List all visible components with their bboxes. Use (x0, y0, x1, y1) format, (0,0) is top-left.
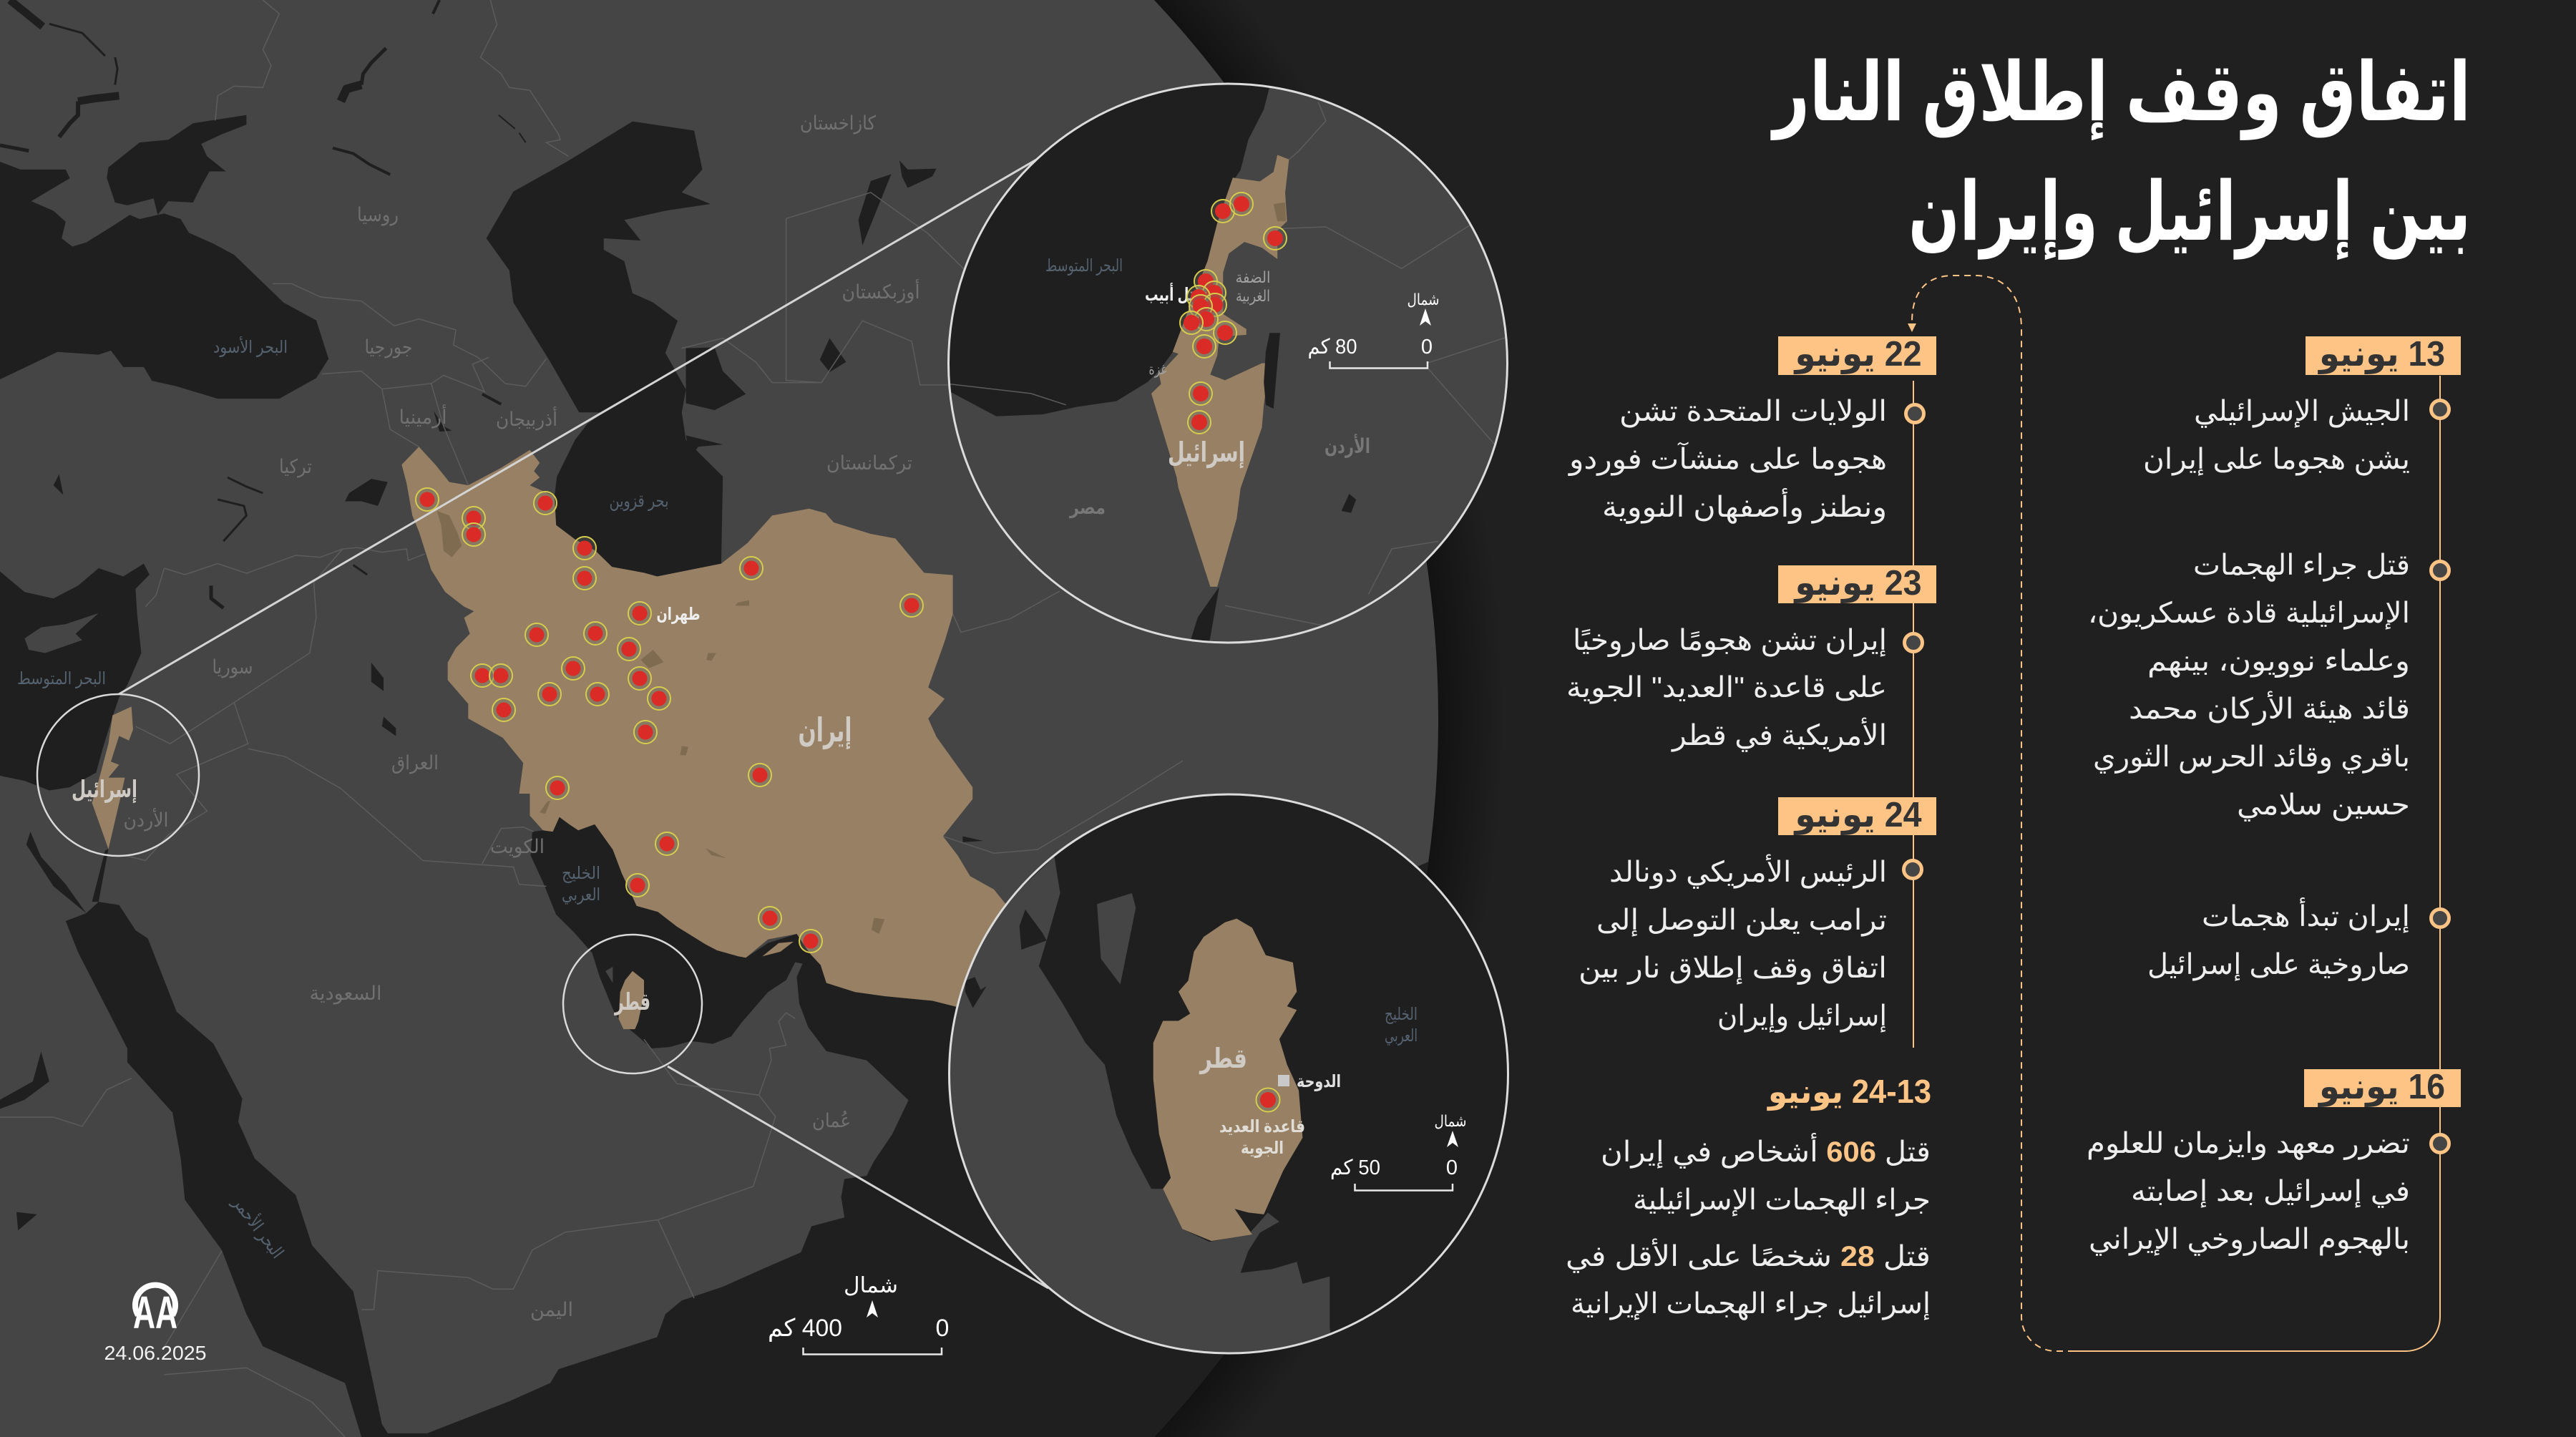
main map labels: البحر الأحمر (228, 1192, 288, 1262)
casualties: Iran: جراء الهجمات الإسرائيلية (1633, 1184, 1931, 1217)
inset labels: Qatar: قاعدة العديد (1219, 1117, 1305, 1136)
small circle: Qatar locator (563, 935, 702, 1073)
text: 13 June event 2: حسين سلامي (2237, 789, 2410, 822)
north arrow and scale bar: Israel: شمال (1407, 291, 1440, 308)
main map (0, 0, 1503, 1437)
main map labels: العراق (391, 752, 439, 774)
marker: Al Udeid (1257, 1088, 1279, 1112)
Qeshm island (762, 942, 794, 956)
main map labels: الأردن (123, 807, 169, 832)
main map labels: بحر قزوين (610, 492, 668, 511)
Iran lakes (437, 511, 884, 934)
inset labels: Israel (1045, 256, 1370, 519)
Bahrain (605, 967, 613, 983)
inset labels: Israel: غزة (1149, 362, 1166, 378)
text: 23 June event: إيران تشن هجومًا صاروخيًا (1573, 625, 1887, 657)
inset Israel shape (1151, 155, 1289, 587)
text: 16 June event (2087, 1128, 2410, 1256)
Israel shape on main map (92, 706, 133, 849)
text: 22 June event: هجوما على منشآت فوردو (1568, 442, 1887, 476)
text: 24 June event: إسرائيل وإيران (1717, 1000, 1887, 1033)
borders (0, 0, 1183, 1437)
Qatar shape on main map (618, 971, 644, 1029)
north arrow and scale bar: main map: 0 (936, 1315, 949, 1342)
text: 13 June event 2 (2088, 550, 2410, 822)
main map labels: كازاخستان (800, 112, 876, 135)
timeline bullets (1903, 401, 2449, 1152)
inset land: Bahrain (1097, 893, 1136, 985)
text: 13 June event 2: وعلماء نوويون، بينهم (2147, 646, 2410, 678)
connector line: Qatar (668, 1066, 1048, 1288)
inset labels: Israel: الغربية (1236, 287, 1270, 305)
casualties: Iran (1601, 1133, 1931, 1217)
title (1770, 47, 2471, 260)
casualties: Israel (1566, 1238, 1931, 1320)
north arrow and scale bar: Qatar: 50 كم (1330, 1156, 1380, 1180)
text: 23 June event: الأمريكية في قطر (1671, 717, 1887, 752)
main map labels: اليمن (530, 1299, 573, 1321)
timeline arrow head (1908, 323, 1916, 332)
text: 22 June event: ونطنز وأصفهان النووية (1602, 488, 1887, 524)
Iran shape (401, 447, 1068, 1007)
date label: 23 June: 23 يونيو (1793, 564, 1922, 603)
date label: 16 June: 16 يونيو (2317, 1068, 2445, 1107)
main map labels: إيران (799, 711, 852, 750)
north arrow and scale bar: Israel: 80 كم (1308, 336, 1357, 359)
north arrow and scale bar: Israel: 0 (1421, 336, 1433, 359)
main map labels: أرمينيا (399, 404, 447, 429)
text: 24 June event: اتفاق وقف إطلاق نار بين (1579, 953, 1887, 985)
main map labels: سوريا (212, 656, 253, 678)
text: 16 June event: تضرر معهد وايزمان للعلوم (2087, 1128, 2410, 1160)
north arrow and scale bar: main map: 400 كم (768, 1315, 842, 1342)
inset labels: Qatar (1199, 1005, 1418, 1158)
inset labels: Qatar: قطر (1199, 1044, 1247, 1074)
casualties heading: 24-13 يونيو (1767, 1073, 1931, 1111)
north arrow and scale bar: Qatar (1330, 1112, 1467, 1191)
text: 13 June event 2: الإسرائيلية قادة عسكريون، (2088, 598, 2410, 630)
casualties: Iran: قتل 606 أشخاص في إيران (1601, 1133, 1931, 1169)
inset labels: Qatar: العربي (1385, 1026, 1418, 1046)
date label: 24 June: 24 يونيو (1793, 796, 1922, 835)
inset Qatar shape (1153, 919, 1302, 1241)
north arrow and scale bar: Qatar: 0 (1446, 1156, 1458, 1179)
text: 13 June event 2: باقري وقائد الحرس الثوري (2093, 741, 2410, 774)
main map labels: إسرائيل (72, 776, 137, 804)
text: 22 June event: الولايات المتحدة تشن (1619, 396, 1887, 428)
text: 13 June event 1 (2143, 396, 2410, 476)
inset: Israel (930, 72, 1508, 643)
inset land: Saudi Arabia (930, 857, 1334, 1357)
main map labels: تركيا (279, 456, 312, 478)
text: 24 June event (1579, 854, 1887, 1033)
main map labels: العربي (562, 885, 600, 905)
north arrow and scale bar: main map: شمال (844, 1274, 898, 1297)
main map labels: تركمانستان (826, 452, 912, 474)
text: 23 June event: على قاعدة "العديد" الجوية (1566, 672, 1887, 704)
main map labels: البحر المتوسط (17, 669, 106, 688)
main map labels: السعودية (309, 983, 382, 1005)
main map labels: أذربيجان (496, 406, 557, 431)
text: 22 June event (1568, 396, 1887, 524)
inset border: Qatar (949, 794, 1508, 1353)
inset labels: Qatar: الخليج (1385, 1005, 1418, 1024)
inset borders (930, 102, 1508, 632)
text: 13 June event 3: صاروخية على إسرائيل (2147, 949, 2410, 981)
north arrow and scale bar: Israel (1308, 291, 1440, 368)
attack markers on Iran (416, 488, 923, 953)
inset labels: Israel: مصر (1068, 497, 1106, 519)
text: 13 June event 1: يشن هجوما على إيران (2143, 444, 2410, 476)
main map labels (17, 112, 920, 1321)
main map labels: الخليج (562, 864, 600, 883)
text: 13 June event 1: الجيش الإسرائيلي (2194, 396, 2410, 428)
north arrow and scale bar: Qatar: شمال (1434, 1112, 1467, 1130)
date label: 22 June: 22 يونيو (1793, 335, 1922, 374)
main map labels: روسيا (357, 204, 399, 226)
main map labels: عُمان (812, 1110, 851, 1131)
text: 16 June event: بالهجوم الصاروخي الإيراني (2089, 1224, 2410, 1256)
inset sea: Mediterranean (930, 72, 1269, 417)
main map labels: البحر الأسود (213, 336, 288, 357)
text: 24 June event: الرئيس الأمريكي دونالد (1609, 854, 1887, 889)
inset labels: Qatar: الدوحة (1297, 1072, 1341, 1091)
inset labels: Israel: إسرائيل (1168, 438, 1245, 469)
Cyprus (24, 613, 99, 653)
inset labels: Israel: الضفة (1235, 268, 1271, 286)
main map labels: قطر (614, 988, 650, 1016)
rivers and reservoirs (0, 0, 526, 608)
date label: 13 June: 13 يونيو (2317, 335, 2445, 374)
main map labels: أوزبكستان (841, 278, 920, 303)
text: 13 June event 2: قتل جراء الهجمات (2193, 550, 2410, 582)
north arrow and scale bar: main map (768, 1274, 949, 1354)
logo: AA: AA (133, 1287, 177, 1338)
timeline connector lines (1912, 276, 2440, 1351)
casualties: Israel: إسرائيل جراء الهجمات الإيرانية (1571, 1288, 1931, 1320)
text: 24 June event: ترامب يعلن التوصل إلى (1596, 905, 1887, 937)
date stamp: 24.06.2025 (104, 1342, 206, 1364)
text: 23 June event (1566, 625, 1887, 752)
text: 13 June event 3 (2147, 897, 2410, 981)
inset dark lagoon (1020, 910, 1047, 950)
inset Sea of Galilee (1274, 203, 1286, 221)
inset border: Israel (949, 84, 1507, 643)
main map labels: جورجيا (365, 336, 412, 359)
inset labels: Israel: البحر المتوسط (1045, 256, 1123, 276)
logo: AA (133, 1285, 177, 1338)
seas (0, 115, 1478, 1437)
small circle: Israel locator (37, 694, 199, 856)
inset Dead Sea and Gulf of Aqaba (1190, 333, 1356, 642)
casualties: Israel: قتل 28 شخصًا على الأقل في (1566, 1238, 1931, 1273)
inset labels: Qatar: الجوية (1241, 1139, 1284, 1158)
connector line: Israel (119, 159, 1038, 694)
marker: Doha square (1278, 1075, 1289, 1086)
text: 13 June event 2: قائد هيئة الأركان محمد (2129, 691, 2410, 726)
inset: Qatar (930, 794, 1508, 1357)
main map labels: الكويت (490, 836, 545, 858)
markers: Israel (1180, 193, 1287, 434)
Tel Aviv label: تل أبيب (1145, 283, 1194, 305)
text: 16 June event: في إسرائيل بعد إصابته (2131, 1176, 2410, 1208)
main map labels: طهران (657, 605, 700, 624)
inset labels: Israel: الأردن (1324, 434, 1370, 458)
text: 13 June event 3: إيران تبدأ هجمات (2202, 897, 2410, 933)
